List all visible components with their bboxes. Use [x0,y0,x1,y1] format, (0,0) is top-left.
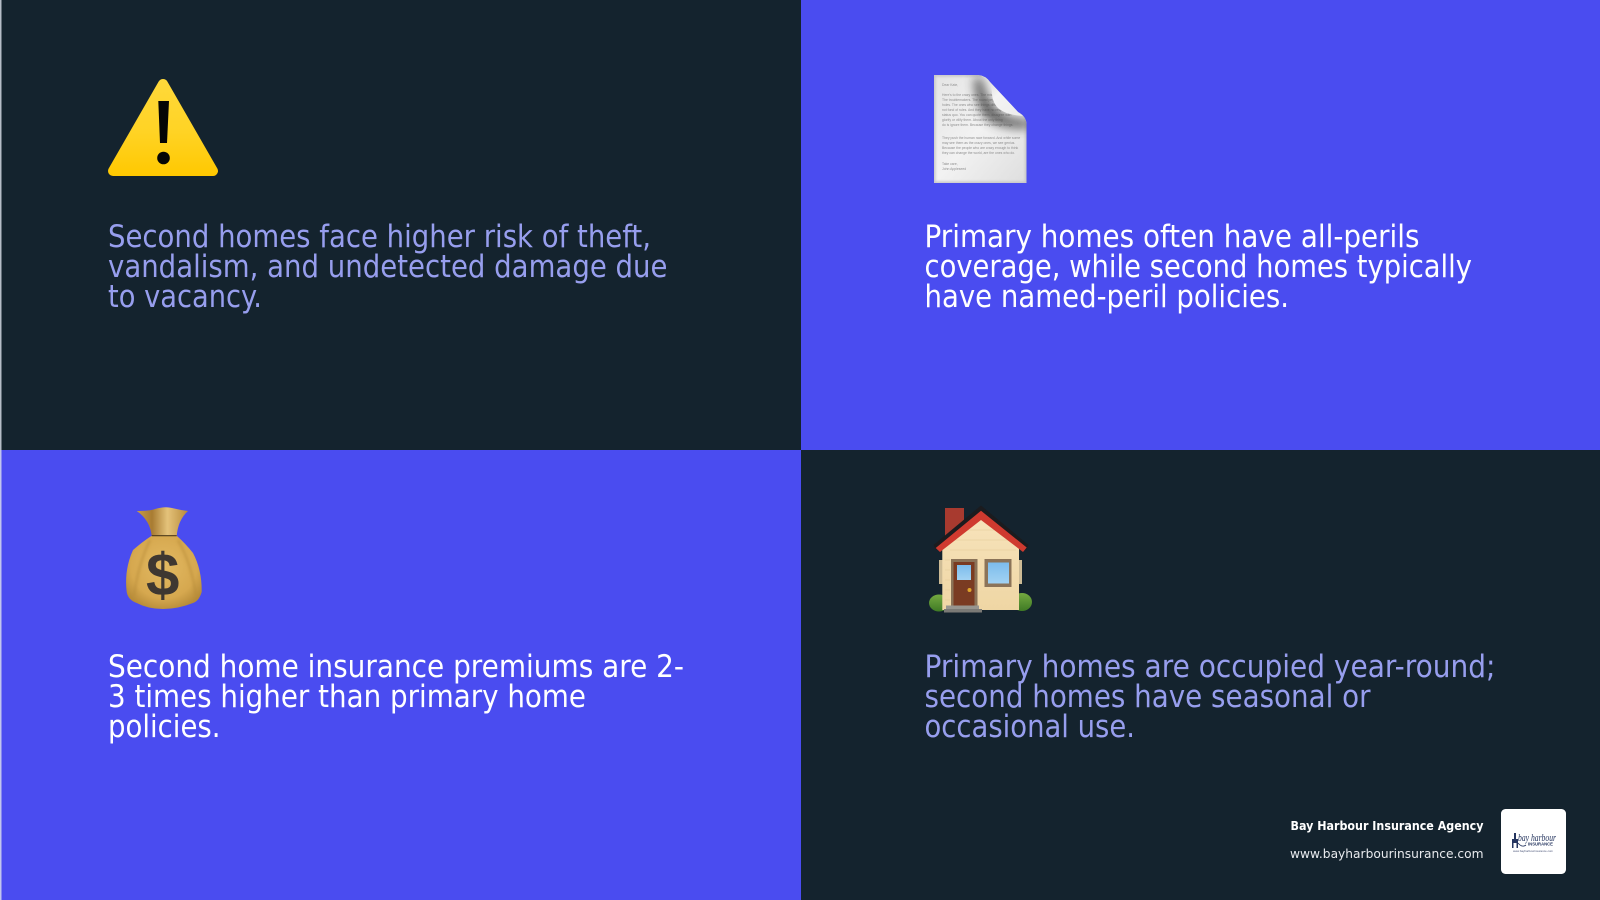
text: coverage comparison [924,219,1472,315]
icon: document page: They push the human race forward. And while some [942,136,1020,140]
panel: occupancy [801,450,1600,900]
text: insurance premiums [108,649,684,745]
panel: insurance premiums [0,450,801,900]
text: insurance premiums: policies. [108,709,220,745]
icon: document page: Dear Kate, [942,83,958,87]
text: coverage comparison: have named-peril policies. [924,279,1289,315]
text: second home risk: vandalism, and undetected damage due [108,249,668,285]
text: second home risk: Second homes face higher risk of theft, [108,219,651,255]
panel: second home risk [0,0,801,450]
text: second home risk [108,219,668,315]
text: occupancy [924,649,1496,745]
icon: document page: Because the people who are crazy enough to think [942,146,1018,150]
icon: house [929,506,1032,612]
text: coverage comparison: Primary homes often have all-perils [924,219,1420,255]
text: insurance premiums: 3 times higher than primary home [108,679,586,715]
agency name: Bay Harbour Insurance Agency [1290,818,1484,833]
text: second home risk: to vacancy. [108,279,262,315]
text: insurance premiums: Second home insurance premiums are 2- [108,649,684,685]
text: coverage comparison: coverage, while second homes typically [924,249,1472,285]
icon: document page: status quo. You can quote them, disagree with [942,113,1011,117]
icon: document page: may see them as the crazy ones, we see genius. [942,141,1015,145]
icon: document page: glorify or vilify them. About the only thing [942,118,1003,122]
icon: document page: Here's to the crazy ones. The misfits. [942,93,998,97]
text: occupancy: occasional use. [924,709,1135,745]
logo: www.bayharbourinsurance.com [1513,850,1553,853]
icon: document page: they can change the world, are the ones who do. [942,151,1015,155]
icon: document page: Take care, [942,162,958,166]
icon: document page: do is ignore them. Because they change things. [942,123,1013,127]
icon: document page: holes. The ones who see things differently. [942,103,1006,107]
icon: document page: not fond of rules. And they have no respect [942,108,1007,112]
icon: money bag: $ [146,542,179,608]
icon: document page [934,75,1030,183]
panel: coverage comparison [801,0,1600,450]
logo [1501,809,1566,874]
logo: bay harbour [1518,832,1556,844]
logo: INSURANCE [1528,842,1553,846]
icon: warning sign [113,84,213,171]
text: occupancy: Primary homes are occupied year-round; [924,649,1496,685]
icon: money bag [126,507,202,609]
icon detail: folded corner [979,75,1023,116]
footer: agency contact [1290,809,1566,874]
icon: document page: John Appleseed [942,167,966,171]
icon: document page: The troublemakers. The round pegs in [942,98,1000,102]
text: occupancy: second homes have seasonal or [924,679,1371,715]
website: www.bayharbourinsurance.com [1290,846,1484,861]
